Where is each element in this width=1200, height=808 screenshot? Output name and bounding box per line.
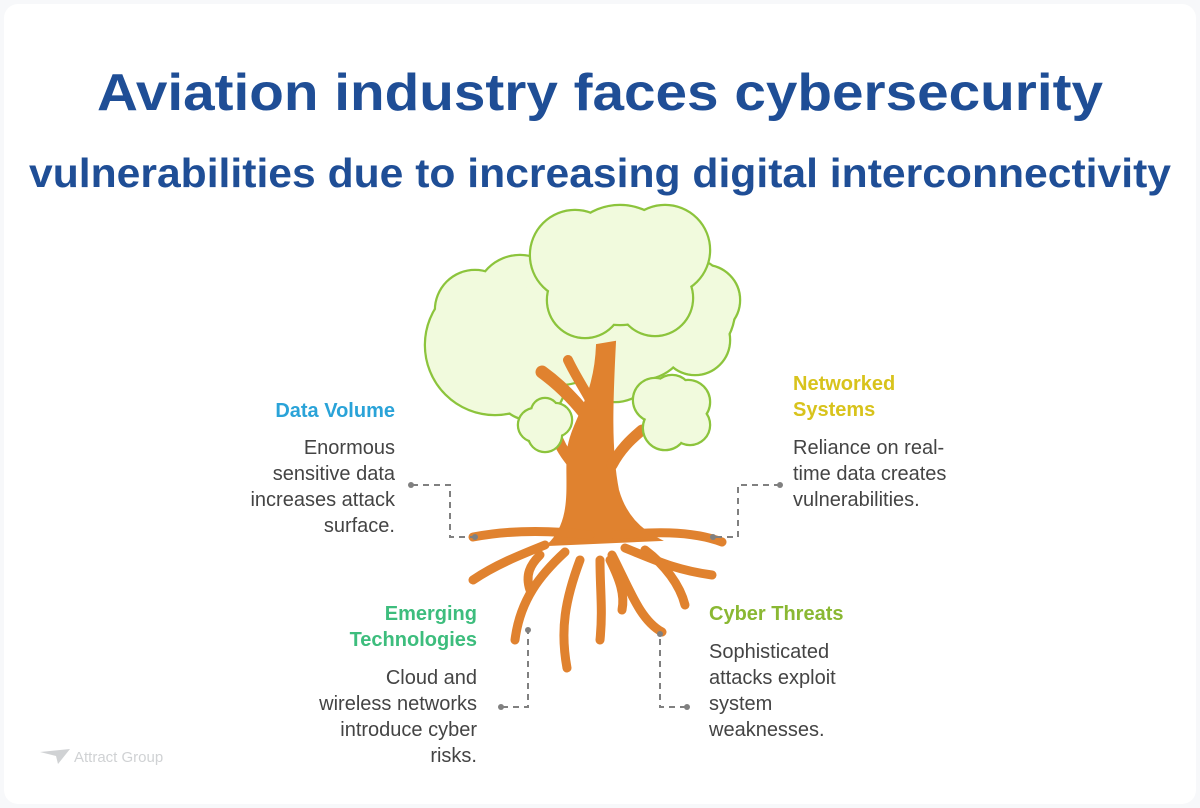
panel: emerging technologies: risks. [430, 745, 477, 767]
small clouds [518, 375, 710, 452]
panel: data volume: Data Volume [275, 400, 395, 422]
panel: networked systems: time data creates [793, 463, 946, 485]
panel: data volume: sensitive data [273, 463, 396, 485]
panel: emerging technologies: Emerging [385, 603, 477, 625]
panel: networked systems [793, 373, 946, 511]
panel: emerging technologies: wireless networks [318, 693, 477, 715]
panel: emerging technologies: introduce cyber [340, 719, 477, 741]
title: vulnerabilities due to increasing digital interconnectivity [29, 150, 1171, 196]
canopy [425, 205, 740, 420]
panel: cyber threats [708, 603, 844, 741]
connectors [412, 485, 780, 707]
panel: cyber threats: attacks exploit [709, 667, 836, 689]
panel: cyber threats: weaknesses. [708, 719, 825, 741]
panel: networked systems: vulnerabilities. [793, 489, 920, 511]
panel: emerging technologies [318, 603, 477, 767]
panel: data volume: Enormous [304, 437, 395, 459]
panel: networked systems: Systems [793, 399, 875, 421]
logo: Attract Group [74, 749, 163, 766]
title: Aviation industry faces cybersecurity [97, 64, 1103, 122]
panel: data volume [250, 400, 396, 537]
panel: cyber threats: system [709, 693, 772, 715]
trunk and branches [473, 342, 722, 668]
panel: cyber threats: Sophisticated [709, 641, 829, 663]
panel: data volume: surface. [324, 515, 395, 537]
panel: data volume: increases attack [250, 489, 396, 511]
panel: cyber threats: Cyber Threats [709, 603, 844, 625]
title [29, 64, 1171, 196]
panel: networked systems: Networked [793, 373, 895, 395]
roots [473, 531, 722, 668]
tree [425, 205, 740, 668]
panel: emerging technologies: Cloud and [386, 667, 477, 689]
panel: emerging technologies: Technologies [350, 629, 477, 651]
panel: networked systems: Reliance on real- [793, 437, 944, 459]
